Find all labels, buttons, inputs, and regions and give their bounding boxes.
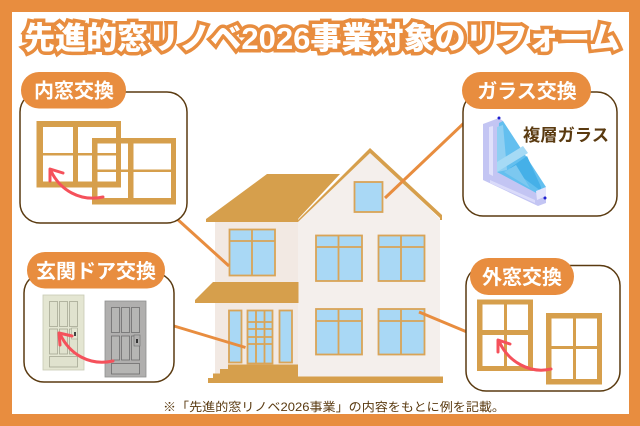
- left upper window: [230, 230, 275, 276]
- footnote: ※「先進的窓リノベ2026事業」の内容をもとに例を記載。: [163, 399, 505, 414]
- lower middle window: [316, 309, 362, 354]
- leader line: outer window: [419, 312, 467, 332]
- panel: inner window replacement: [20, 72, 187, 223]
- left side light: [229, 310, 242, 362]
- house main wall: [298, 152, 440, 378]
- panel: entrance door replacement: [24, 252, 174, 382]
- icon: new door: [43, 295, 84, 370]
- foundation: [298, 376, 443, 383]
- glass label: 複層ガラス: [523, 125, 609, 145]
- label: door: [27, 252, 165, 288]
- house: [195, 148, 443, 383]
- lower right window: [378, 309, 424, 354]
- label: outer window: 外窓交換: [482, 266, 562, 289]
- arrow: [498, 340, 551, 370]
- front door: [248, 310, 272, 364]
- lower-wing roof: [206, 174, 340, 222]
- upper right window: [378, 236, 424, 281]
- label: inner window: 内窓交換: [34, 80, 114, 102]
- leader line: inner window: [176, 218, 229, 266]
- back window frame: [36, 121, 121, 188]
- main gable roof: [298, 148, 442, 222]
- icon: double glazing cross-section: [483, 116, 546, 206]
- front window frame: [92, 138, 176, 204]
- dormer window: [354, 182, 382, 212]
- leader line: door: [174, 326, 246, 348]
- label: outer window: [470, 258, 574, 295]
- label: glass: [462, 72, 591, 109]
- panel: outer window replacement: [466, 258, 620, 391]
- label: door: 玄関ドア交換: [36, 260, 156, 283]
- porch steps: [208, 364, 298, 383]
- label: glass: ガラス交換: [477, 80, 577, 103]
- label: inner window: [21, 72, 126, 108]
- upper middle window: [316, 236, 362, 281]
- right side light: [280, 310, 292, 362]
- new window frame: [546, 313, 602, 384]
- leader line: glass: [385, 123, 464, 198]
- title: 先進的窓リノベ2026事業対象のリフォーム: [24, 21, 620, 56]
- house left wall: [215, 218, 299, 378]
- icon: old door: [105, 301, 146, 377]
- arrow: [50, 169, 103, 198]
- porch canopy: [195, 282, 298, 303]
- arrow: [59, 333, 113, 362]
- panel: glass replacement: [462, 72, 617, 216]
- old-position window frame: [477, 300, 533, 371]
